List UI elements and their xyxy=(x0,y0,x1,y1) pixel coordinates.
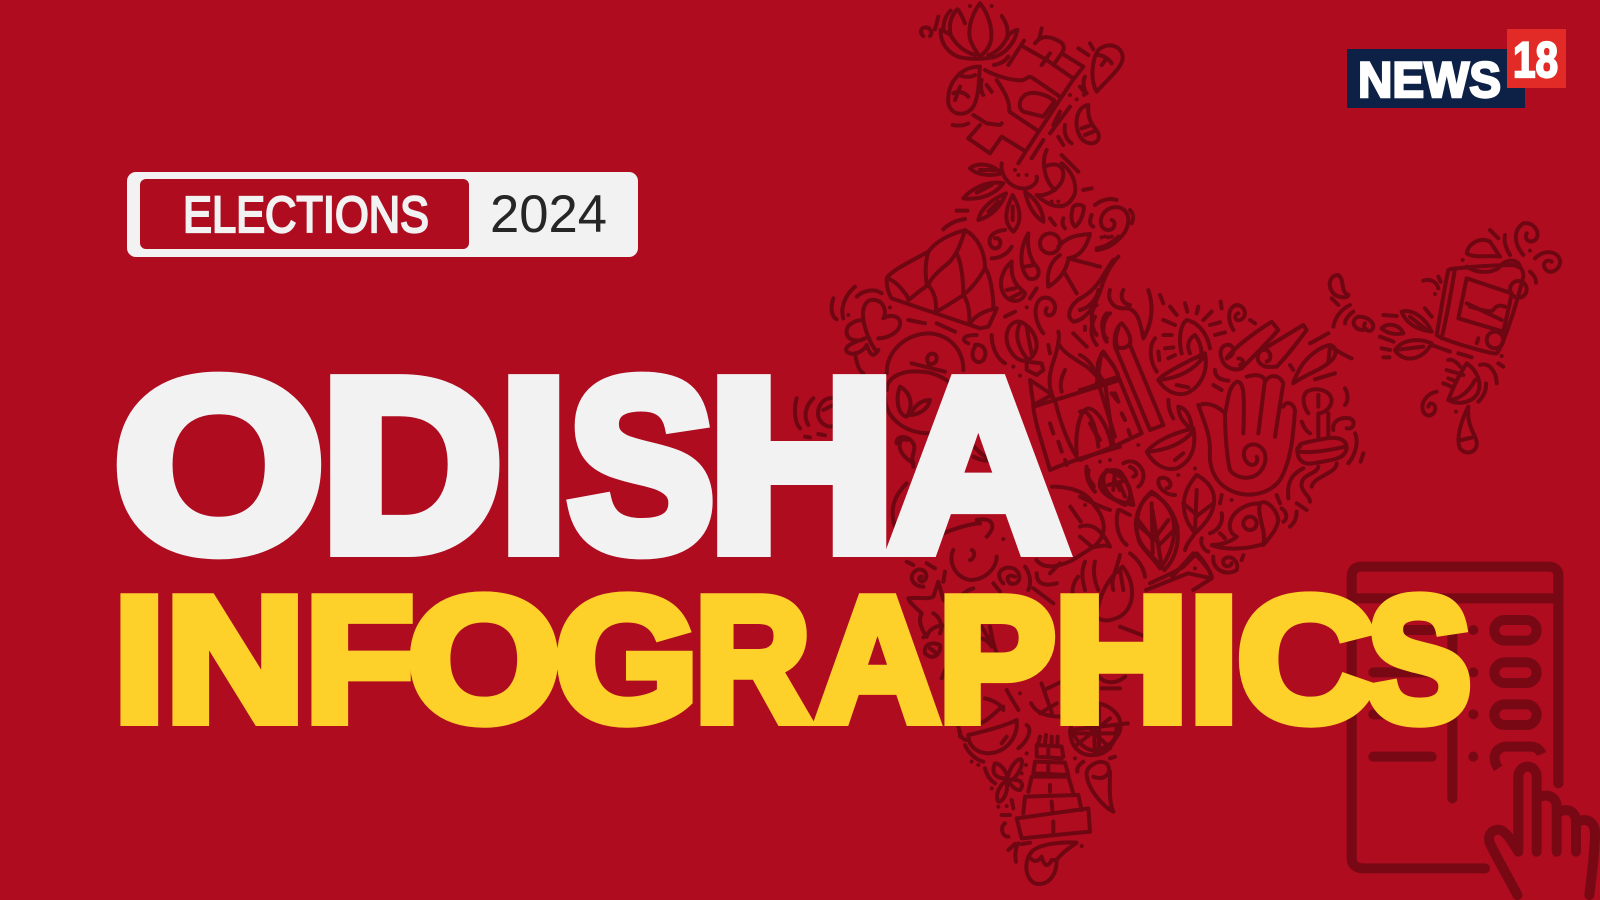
icon: small flower xyxy=(972,753,1027,807)
icon: orange xyxy=(1070,710,1117,772)
logo number 18: 18 xyxy=(1513,32,1558,88)
title: ODISHA: D xyxy=(321,330,502,602)
title: ODISHA xyxy=(114,329,1069,602)
subtitle: INFOGRAPHICS: S xyxy=(1367,561,1471,759)
doodles: southern tip xyxy=(960,710,1117,884)
title: ODISHA: H xyxy=(708,330,896,602)
icon: round fruit with leaves xyxy=(885,333,992,463)
subtitle: INFOGRAPHICS: I xyxy=(1189,560,1239,758)
doodles: north-east states xyxy=(1330,223,1560,453)
icon: lotus temple xyxy=(887,230,997,328)
icon: small south-east doodles xyxy=(1080,497,1212,590)
machine frame xyxy=(1352,567,1558,868)
logo word NEWS: NEWS xyxy=(1358,52,1501,108)
subtitle: INFOGRAPHICS: F xyxy=(305,560,414,758)
icon: potted plant xyxy=(1288,388,1363,510)
icon: figure and knot xyxy=(1040,233,1118,348)
machine buttons xyxy=(1494,620,1542,768)
icon: mosque left half xyxy=(1030,332,1120,470)
badge background xyxy=(127,172,638,257)
icon: upper diya xyxy=(1151,303,1225,394)
logo navy block xyxy=(1347,49,1525,108)
subtitle: INFOGRAPHICS xyxy=(114,560,1471,759)
subtitle: INFOGRAPHICS: A xyxy=(815,561,940,759)
icon: lotus xyxy=(921,3,1017,65)
icon: rose xyxy=(1201,495,1297,573)
doodles: diyas, hand, leaves and rose in the east xyxy=(1080,290,1363,590)
icon: cinnamon sticks and chilli xyxy=(1213,302,1352,390)
badge year: 2024 xyxy=(490,185,607,244)
icon: drop and leaves xyxy=(1330,275,1450,359)
icon: shell and drop xyxy=(1422,353,1503,453)
badge: Elections 2024 xyxy=(127,172,638,257)
icon: elephant xyxy=(893,439,1003,580)
icon: spiral and strawberry xyxy=(907,562,1060,678)
subtitle: INFOGRAPHICS: R xyxy=(695,560,811,758)
logo red block xyxy=(1507,29,1566,88)
icon: flower with ring xyxy=(963,150,1078,232)
icon: bowl slice xyxy=(960,720,1029,762)
badge label box xyxy=(140,179,469,249)
subtitle: INFOGRAPHICS: G xyxy=(555,562,698,759)
badge label: ELECTIONS xyxy=(183,186,429,243)
icon: mosque right half and pencil xyxy=(1080,290,1163,460)
icon: curls and top leaf xyxy=(1423,223,1560,294)
icon: curl between the H stems xyxy=(795,398,835,437)
doodle map of India xyxy=(795,3,1560,884)
icon: orange slice and bits xyxy=(1031,680,1128,751)
title: ODISHA: O xyxy=(114,329,324,602)
icon: west flower xyxy=(832,287,955,373)
subtitle: INFOGRAPHICS: P xyxy=(938,561,1056,759)
subtitle: INFOGRAPHICS: I xyxy=(114,561,165,759)
subtitle: INFOGRAPHICS: H xyxy=(1054,560,1189,758)
icon: doodles behind the P xyxy=(958,627,1057,740)
doodles: lotus, palace and flower in the north xyxy=(921,3,1133,250)
icon: open hand with spiral xyxy=(1198,375,1295,495)
icon: lower diya xyxy=(1147,400,1194,469)
subtitle: INFOGRAPHICS: O xyxy=(408,560,560,758)
title: ODISHA: A xyxy=(888,329,1069,602)
icon: paisley xyxy=(1087,762,1113,812)
icon: book xyxy=(1437,260,1527,353)
icon: palace and sword xyxy=(968,28,1123,163)
icon: bulb and drops xyxy=(964,230,1055,376)
title: ODISHA: S xyxy=(568,330,714,602)
icon: shell at the tip xyxy=(1002,800,1082,884)
pointing hand xyxy=(1489,767,1595,895)
icon: bird xyxy=(1036,470,1130,566)
doodles: bird, chilli, pestle around the south-centre xyxy=(1031,470,1212,751)
icon: voting machine with pointing hand xyxy=(1352,567,1595,895)
subtitle: INFOGRAPHICS: C xyxy=(1237,561,1375,759)
logo: News18 xyxy=(1347,29,1566,108)
icon: large leaf and chilli xyxy=(1072,493,1212,688)
icon: temple tower xyxy=(1017,735,1090,838)
doodles: central peninsula xyxy=(795,398,1060,740)
subtitle: INFOGRAPHICS: N xyxy=(165,561,305,759)
doodles: lotus temple, flower, mosque in the west and centre xyxy=(832,230,1120,470)
icon: pumpkin and drop xyxy=(948,67,1099,145)
machine rows xyxy=(1352,598,1558,798)
title: ODISHA: I xyxy=(499,329,568,602)
icon: swirl doodles xyxy=(943,188,1133,250)
icon: leaves xyxy=(1086,445,1214,568)
